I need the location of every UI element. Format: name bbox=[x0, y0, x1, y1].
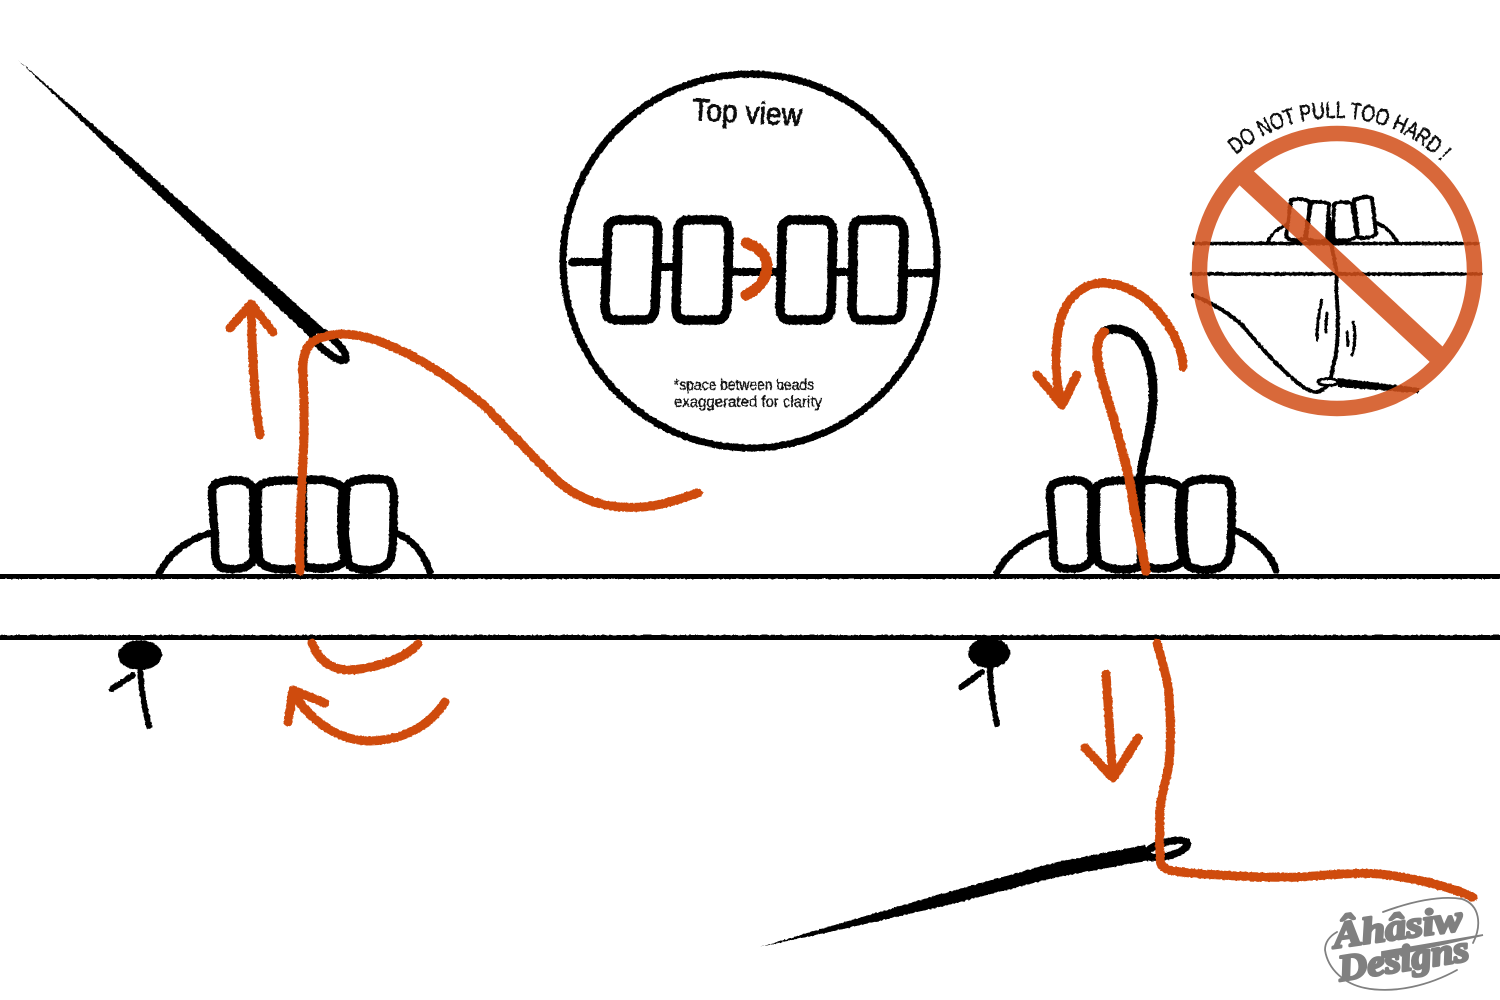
bottom needle bbox=[760, 837, 1189, 947]
fabric edge lines bbox=[0, 576, 1500, 638]
left needle bbox=[18, 60, 350, 365]
logo needle bbox=[1382, 935, 1483, 958]
logo wordmark: Âhâsiw bbox=[1328, 897, 1465, 957]
right beads bbox=[1050, 479, 1232, 570]
left beads bbox=[212, 479, 394, 570]
curved arrow under the fabric bbox=[288, 690, 445, 741]
right thread through bottom needle bbox=[1157, 643, 1473, 897]
warning caption: DO NOT PULL TOO HARD ! bbox=[1227, 101, 1452, 162]
inset circle bbox=[563, 74, 937, 448]
down arrow bbox=[1085, 674, 1138, 778]
logo wordmark bbox=[1328, 897, 1472, 990]
left step: bead stitch with needle bbox=[18, 60, 698, 741]
right knot and tail bbox=[961, 638, 1010, 724]
right orange thread loop bbox=[1097, 332, 1146, 571]
warning drawing bbox=[1192, 197, 1481, 393]
logo bbox=[1325, 897, 1483, 990]
left knot and tail bbox=[112, 640, 162, 726]
top view inset bbox=[563, 74, 937, 448]
prohibition sign bbox=[1200, 134, 1474, 408]
up arrow bbox=[230, 304, 273, 435]
inset title: Top view bbox=[691, 92, 804, 133]
inset note: *space between beads bbox=[674, 377, 814, 394]
inset thread bbox=[572, 262, 933, 273]
inset note: exaggerated for clarity bbox=[674, 394, 822, 411]
logo swoosh outline bbox=[1325, 898, 1478, 990]
thread under the fabric bbox=[312, 643, 418, 670]
right fabric arcs bbox=[997, 530, 1276, 572]
right black thread loop bbox=[1104, 329, 1153, 500]
inset beads bbox=[605, 220, 904, 320]
left fabric arcs bbox=[159, 533, 430, 573]
do not pull too hard warning bbox=[1190, 101, 1483, 416]
logo wordmark: Designs bbox=[1334, 929, 1472, 990]
left thread through needle bbox=[300, 334, 698, 571]
curved arrow over the loop bbox=[1037, 283, 1183, 405]
right step: pulling thread through bbox=[760, 283, 1473, 947]
inset orange stitch bbox=[746, 243, 767, 295]
